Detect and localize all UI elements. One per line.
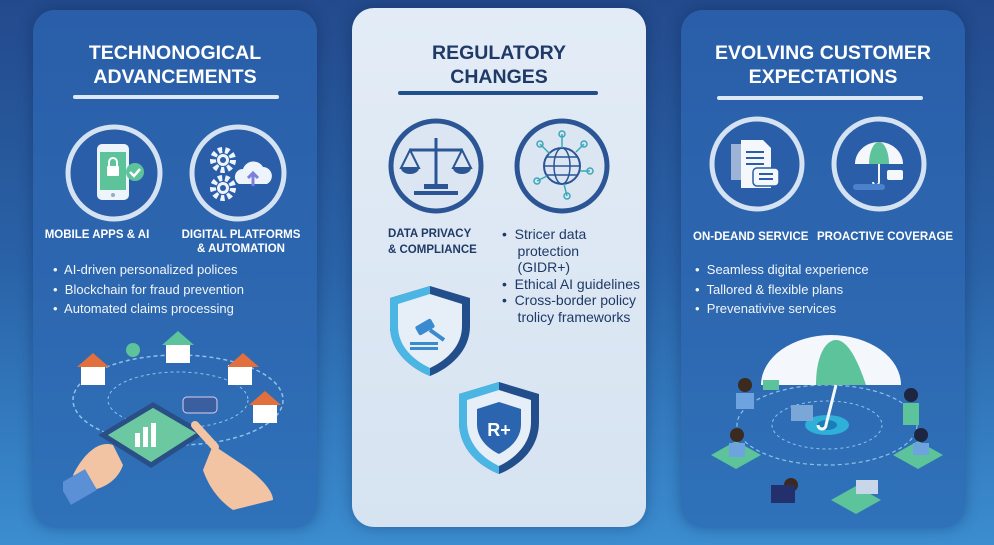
bullets: • AI-driven personalized polices (53, 262, 237, 277)
labels: ON-DEAND SERVICE (693, 231, 808, 243)
title (432, 42, 566, 88)
bullets: • Seamless digital experience (695, 262, 869, 277)
label (388, 228, 477, 256)
illustration: umbrella & people (711, 335, 943, 514)
panel: technological advancements: DIGITAL PLATFORMS (182, 229, 300, 241)
illustration: houses network tablet (63, 331, 284, 510)
icon: shield R+: R+ (487, 420, 511, 440)
icon: shield R+ (459, 382, 539, 474)
icon: globe network (514, 118, 610, 214)
panel: technological advancements (33, 10, 317, 528)
bullets: • Stricer data (502, 226, 586, 242)
icon: umbrella (832, 116, 926, 212)
icon: scales (388, 118, 484, 214)
title (715, 42, 931, 88)
icon: shield gavel (390, 286, 470, 376)
icon: documents chat (710, 116, 804, 212)
panel: technological advancements: & AUTOMATION (197, 243, 285, 255)
label: & COMPLIANCE (388, 244, 477, 256)
icon: mobile lock (66, 124, 162, 222)
bullets: • Automated claims processing (53, 301, 234, 316)
bullets: • Cross-border policy (502, 292, 636, 308)
bullets: • Prevenativive services (695, 301, 836, 316)
title: EXPECTATIONS (749, 66, 897, 88)
label: DATA PRIVACY (388, 228, 471, 240)
panel: evolving customer expectations (681, 10, 965, 528)
bullets: protection (518, 242, 579, 258)
bullets: trolicy frameworks (518, 308, 630, 324)
bullets: • Blockchain for fraud prevention (53, 282, 244, 296)
bullets: • Tallored & flexible plans (695, 282, 843, 296)
title (89, 42, 261, 88)
labels: MOBILE APPS & AI (45, 229, 149, 241)
panel: regulatory changes (352, 8, 646, 527)
bullets (502, 226, 640, 325)
bullets (695, 262, 869, 316)
title: EVOLVING CUSTOMER (715, 42, 931, 64)
title: CHANGES (450, 66, 548, 88)
bullets: • Ethical AI guidelines (502, 276, 640, 292)
title: ADVANCEMENTS (93, 66, 257, 88)
title: TECHNONOGICAL (89, 42, 261, 64)
bullets (53, 262, 244, 316)
icon: gears cloud (190, 124, 286, 222)
bullets: (GIDR+) (518, 259, 570, 275)
title: REGULATORY (432, 42, 566, 64)
panel: evolving customer expectations: PROACTIVE COVERAGE (817, 231, 953, 243)
